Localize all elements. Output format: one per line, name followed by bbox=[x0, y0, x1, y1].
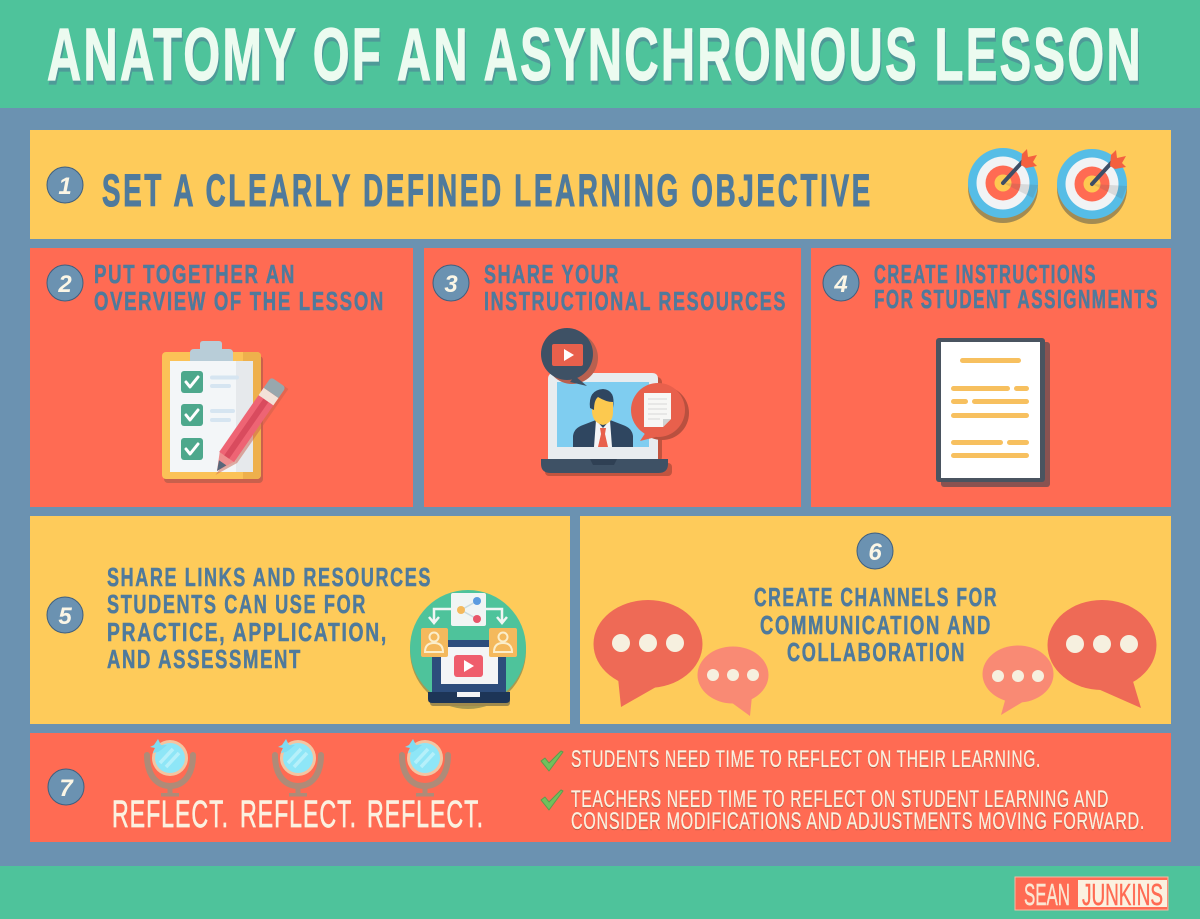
icon: mirror one bbox=[147, 739, 193, 796]
speech bubble: video bbox=[541, 328, 598, 386]
text: step 5: SHARE LINKS AND RESOURCES bbox=[107, 562, 432, 592]
reflect word row: REFLECT. bbox=[112, 794, 229, 836]
panel: step 5 links bbox=[30, 516, 570, 724]
bullet text two bbox=[571, 786, 1145, 835]
number badge 6: 6 bbox=[868, 539, 882, 566]
heading: step 2 bbox=[94, 259, 385, 316]
number badge 4: 4 bbox=[833, 271, 848, 298]
number badge 5 bbox=[47, 597, 83, 633]
logo: Sean Junkins: SEAN bbox=[1024, 877, 1070, 912]
reflect word row bbox=[112, 794, 484, 836]
text: step 5: STUDENTS CAN USE FOR bbox=[107, 589, 367, 619]
icon: mirror three bbox=[402, 739, 448, 796]
icon: left chat bubbles bbox=[594, 600, 768, 716]
icon: mirror two bbox=[275, 739, 321, 796]
icon: target one bbox=[968, 148, 1038, 223]
icon: clipboard and pencil bbox=[162, 341, 288, 483]
number badge 6 bbox=[857, 533, 893, 569]
icon: right chat bubbles bbox=[982, 600, 1156, 715]
number badge 3 bbox=[433, 265, 469, 301]
number badge 2 bbox=[47, 265, 83, 301]
panel: step 2 overview bbox=[30, 248, 413, 507]
reflect word row: REFLECT. bbox=[240, 794, 357, 836]
heading: step 4 bbox=[874, 259, 1159, 314]
text: step 6: COMMUNICATION AND bbox=[760, 610, 992, 640]
reflect word row: REFLECT. bbox=[367, 794, 484, 836]
number badge 7 bbox=[48, 769, 84, 805]
number badge 4 bbox=[823, 265, 859, 301]
footer banner bbox=[0, 866, 1200, 919]
heading: step 3 bbox=[484, 259, 787, 316]
number badge 5: 5 bbox=[58, 603, 72, 630]
icon: check one bbox=[541, 751, 563, 771]
text: step 5: PRACTICE, APPLICATION, bbox=[107, 617, 388, 647]
heading: step 2: PUT TOGETHER AN bbox=[94, 259, 296, 289]
panel: step 7 reflect bbox=[30, 733, 1171, 842]
text: step 5: AND ASSESSMENT bbox=[107, 644, 302, 674]
text: step 5 bbox=[107, 562, 432, 674]
text: step 6: CREATE CHANNELS FOR bbox=[754, 582, 998, 612]
number badge 7: 7 bbox=[59, 775, 74, 802]
number badge 3: 3 bbox=[444, 271, 458, 298]
icon: target two bbox=[1057, 149, 1127, 224]
panel: step 1 objective bbox=[30, 130, 1171, 239]
panel: step 4 assignments bbox=[811, 248, 1171, 507]
heading: step 3: SHARE YOUR bbox=[484, 259, 620, 289]
number badge 2: 2 bbox=[57, 271, 72, 298]
panel: step 6 channels bbox=[580, 516, 1171, 724]
icon: instruction document bbox=[936, 338, 1050, 487]
text: step 6 bbox=[754, 582, 998, 667]
speech bubble: document bbox=[631, 383, 689, 441]
number badge 1 bbox=[47, 167, 83, 203]
icon: sharing and video bbox=[410, 590, 526, 709]
heading: step 2: OVERVIEW OF THE LESSON bbox=[94, 286, 385, 316]
title banner bbox=[0, 0, 1200, 108]
icon: video lesson laptop bbox=[541, 328, 689, 476]
text: step 6: COLLABORATION bbox=[787, 637, 966, 667]
number badge 1: 1 bbox=[58, 173, 72, 200]
presenter bbox=[573, 389, 633, 447]
logo: Sean Junkins bbox=[1015, 877, 1168, 912]
heading: step 3: INSTRUCTIONAL RESOURCES bbox=[484, 286, 787, 316]
icon: check two bbox=[541, 790, 563, 810]
panel: step 3 resources bbox=[424, 248, 801, 507]
